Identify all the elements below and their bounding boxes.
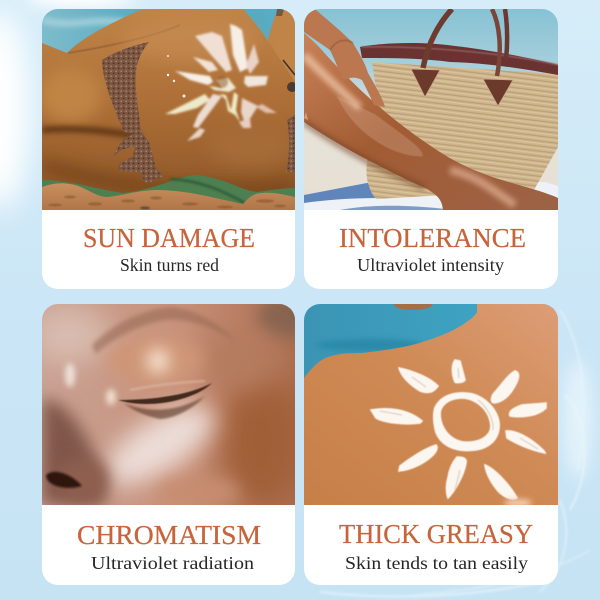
panel: sun damage: [38, 9, 297, 289]
photo: close-up of face and closed eye: [42, 304, 295, 505]
cream sun: ring and rays: [371, 360, 546, 499]
text: ultraviolet radiation: Ultraviolet radiation: [91, 553, 254, 573]
photo: leg and straw bag on beach: [304, 9, 558, 210]
heading: sun damage: SUN DAMAGE: [83, 222, 255, 253]
panel: thick greasy: [304, 300, 558, 585]
text: skin tends to tan easily: Skin tends to tan easily: [345, 553, 528, 573]
text: ultraviolet intensity: Ultraviolet intensity: [357, 255, 504, 275]
sand: [42, 183, 295, 210]
leg: [304, 33, 558, 210]
heading: thick greasy: THICK GREASY: [339, 518, 533, 549]
photo: sunbather with cream sun on back: [38, 9, 297, 210]
panel: intolerance: [304, 9, 558, 289]
heading: chromatism: CHROMATISM: [77, 519, 261, 550]
text: skin turns red: Skin turns red: [120, 255, 219, 275]
cream sun: [165, 24, 277, 141]
bikini: [102, 42, 297, 184]
towel: [304, 182, 558, 210]
panel: chromatism: [42, 304, 295, 585]
heading: intolerance: INTOLERANCE: [339, 222, 526, 253]
closed eye and lashes: [118, 383, 212, 404]
photo: shoulder with cream sun: [304, 300, 558, 507]
straw bag: [366, 62, 558, 199]
hand: [304, 9, 385, 107]
towel: [42, 175, 295, 204]
eyebrow: [92, 307, 236, 354]
